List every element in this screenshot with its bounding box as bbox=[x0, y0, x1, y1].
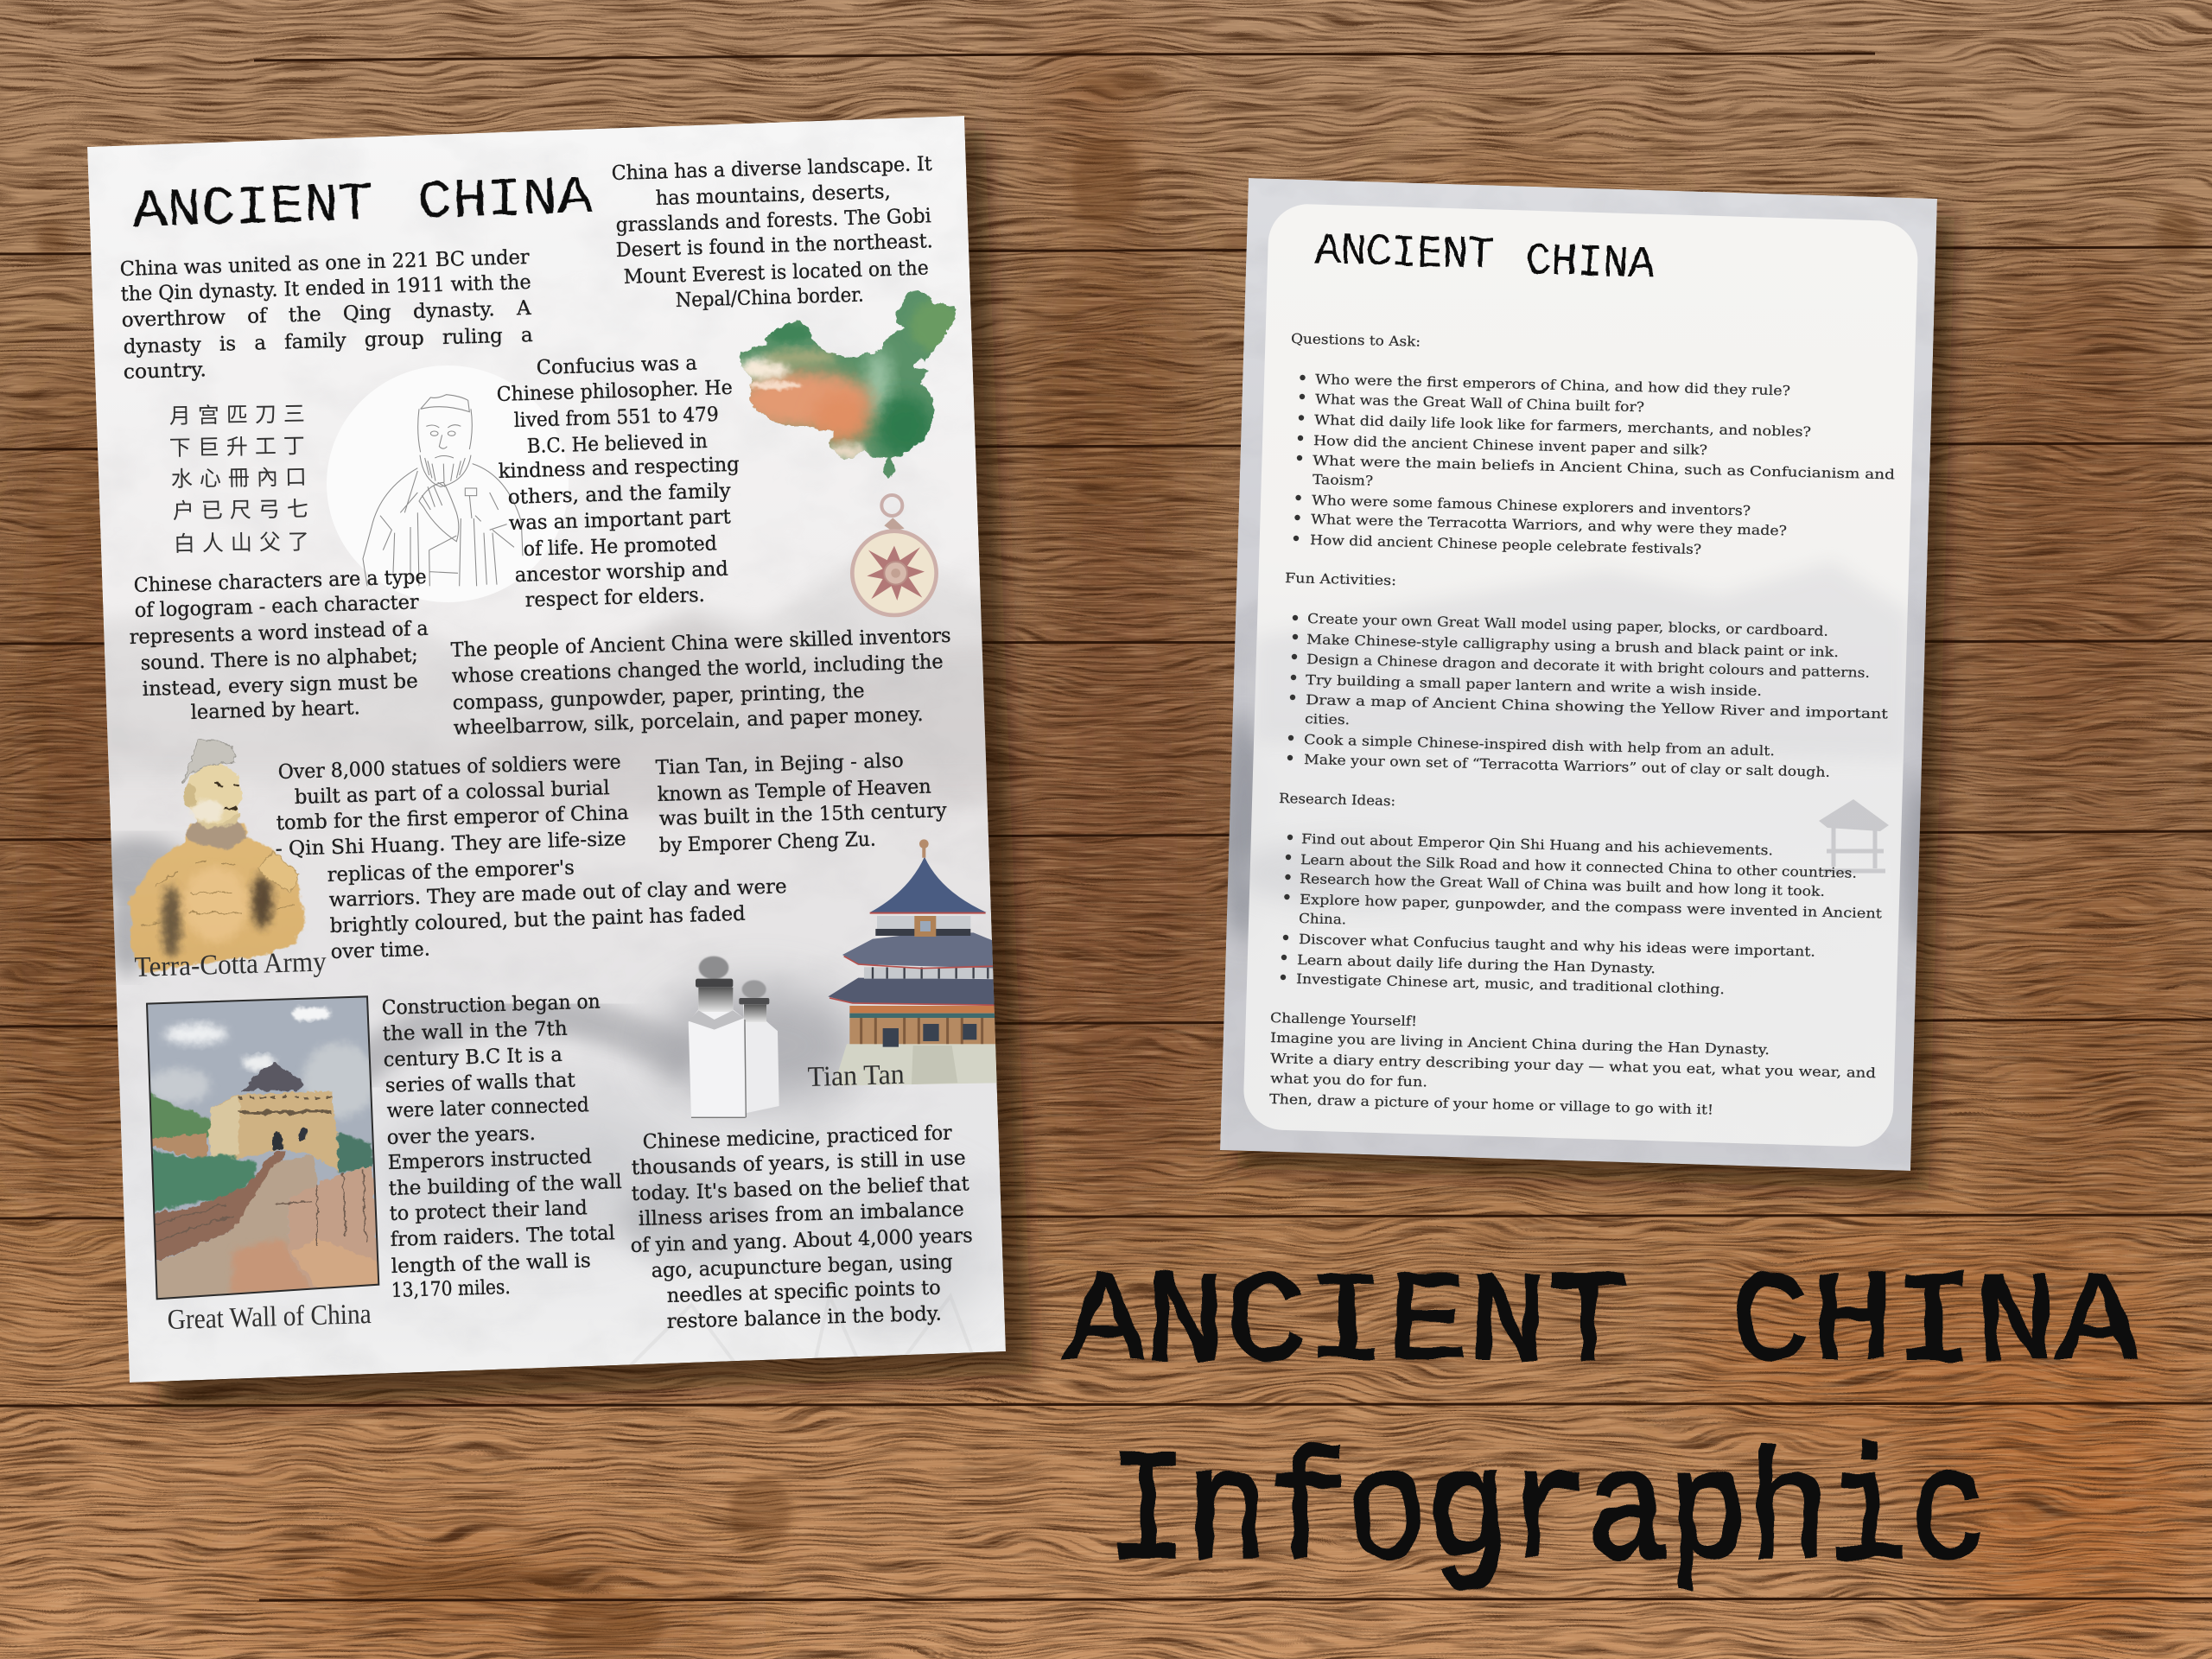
illustration: watercolour map of China bbox=[732, 285, 962, 481]
text: Chinese characters: of logogram - each character bbox=[134, 591, 419, 622]
ink wash background of activities page bbox=[1218, 178, 1942, 1171]
label: Tian Tan: Tian Tan bbox=[807, 1059, 905, 1093]
text: terracotta soldiers: Over 8,000 statues of soldiers were bbox=[277, 751, 621, 784]
ink wash mountains background bbox=[69, 116, 1020, 1382]
text: Great Wall construction: Construction began on bbox=[381, 990, 601, 1020]
Chinese characters grid bbox=[169, 402, 309, 556]
section: fun activities bbox=[1285, 570, 1889, 780]
panel: main infographic page bbox=[69, 116, 1020, 1382]
text: terracotta soldiers: replicas of the emporer's bbox=[327, 857, 575, 887]
label: Terra-Cotta Army: Terra-Cotta Army bbox=[134, 946, 327, 983]
section: fun activities: Cook a simple Chinese-inspired dish with help from an adult. bbox=[1304, 732, 1775, 759]
text: inventors bbox=[450, 625, 951, 740]
shadow of activity page bbox=[1237, 199, 1955, 1191]
heading: ANCIENT CHINA: ANCIENT bbox=[131, 174, 373, 243]
Chinese characters grid: 月宫匹刀三 bbox=[169, 402, 305, 429]
text: Great Wall construction: century B.C It is a bbox=[383, 1044, 563, 1071]
section: research ideas: Investigate Chinese art, music, and traditional clothing. bbox=[1296, 971, 1725, 997]
text: Chinese characters bbox=[129, 566, 429, 724]
text: Great Wall construction: length of the wall is bbox=[391, 1249, 591, 1278]
Chinese characters grid: 白人山父了 bbox=[174, 530, 309, 556]
text: Great Wall construction: the wall in the 7th bbox=[382, 1018, 568, 1046]
Chinese characters grid: 水心冊內口 bbox=[171, 465, 307, 492]
shadow of main page bbox=[112, 130, 1033, 1410]
text: Tian Tan: Tian Tan, in Bejing - also bbox=[655, 749, 904, 779]
text: terracotta soldiers: - Qin Shi Huang. They are life-size bbox=[275, 828, 626, 861]
section: challenge yourself: what you do for fun. bbox=[1270, 1071, 1427, 1090]
text: Chinese medicine: illness arises from an imbalance bbox=[638, 1198, 964, 1230]
section: research ideas: Research how the Great Wall of China was built and how long it took. bbox=[1300, 871, 1825, 899]
section: research ideas: Learn about daily life during the Han Dynasty. bbox=[1297, 952, 1656, 976]
text: Great Wall construction: Emperors instructed bbox=[387, 1146, 592, 1174]
text: Confucius: Confucius was a bbox=[536, 352, 697, 379]
text: terracotta soldiers: warriors. They are made out of clay and were bbox=[328, 875, 787, 912]
heading: ANCIENT CHINA (activities page): CHINA bbox=[1525, 236, 1656, 290]
label: Great Wall of China: Great Wall of China bbox=[167, 1299, 372, 1336]
text: diverse landscape bbox=[611, 153, 933, 312]
text: Great Wall construction: the building of the wall bbox=[388, 1171, 622, 1200]
text: Confucius: ancestor worship and bbox=[514, 558, 728, 587]
section: fun activities: Fun Activities: bbox=[1285, 570, 1396, 588]
text: Great Wall construction: series of walls that bbox=[385, 1069, 576, 1097]
text: Confucius: B.C. He believed in bbox=[526, 430, 708, 458]
text: diverse landscape: Desert is found in the northeast. bbox=[615, 230, 933, 262]
text: Great Wall construction: to protect their land bbox=[389, 1197, 588, 1225]
text: Great Wall construction: were later connected bbox=[386, 1094, 589, 1122]
section: fun activities: Try building a small paper lantern and write a wish inside. bbox=[1306, 672, 1762, 699]
section: research ideas: Find out about Emperor Qin Shi Huang and his achievements. bbox=[1301, 831, 1773, 858]
section: fun activities: cities. bbox=[1305, 711, 1350, 728]
section: challenge yourself bbox=[1269, 1010, 1876, 1118]
section: research ideas bbox=[1279, 791, 1883, 997]
text: Confucius: kindness and respecting bbox=[498, 454, 740, 483]
text: Chinese medicine: today. It's based on the belief that bbox=[631, 1173, 970, 1205]
text: inventors: compass, gunpowder, paper, printing, the bbox=[452, 680, 865, 715]
section: challenge yourself: Then, draw a picture of your home or village to go with it! bbox=[1269, 1091, 1713, 1118]
text: Chinese characters: instead, every sign must be bbox=[142, 671, 418, 701]
text: Chinese medicine: Chinese medicine, practiced for bbox=[642, 1122, 952, 1154]
text: Confucius: respect for elders. bbox=[524, 584, 705, 612]
text: Great Wall construction bbox=[381, 990, 622, 1302]
text: China unification: country. bbox=[123, 359, 207, 384]
text: diverse landscape: Mount Everest is located on the bbox=[623, 257, 929, 289]
section: questions to ask: How did the ancient Chinese invent paper and silk? bbox=[1313, 433, 1707, 458]
heading: ANCIENT CHINA: CHINA bbox=[416, 167, 594, 234]
section: challenge yourself: Write a diary entry describing your day — what you eat, what you wear, and bbox=[1270, 1051, 1876, 1081]
title: ANCIENT CHINA on wood bbox=[1065, 1254, 2139, 1397]
text: Confucius bbox=[496, 352, 740, 612]
section: research ideas: Research Ideas: bbox=[1279, 791, 1395, 809]
text: Chinese characters: Chinese characters are a type bbox=[133, 566, 427, 597]
section: challenge yourself: Imagine you are living in Ancient China during the Han Dynasty. bbox=[1270, 1030, 1770, 1058]
text: diverse landscape: has mountains, deserts, bbox=[655, 181, 891, 210]
panel: activities page bbox=[1218, 178, 1942, 1171]
text: Tian Tan: known as Temple of Heaven bbox=[657, 776, 931, 806]
text: Chinese medicine: ago, acupuncture began, using bbox=[651, 1251, 953, 1282]
section: questions to ask: Taoism? bbox=[1313, 472, 1373, 489]
text: China unification: overthrow of the Qing dynasty. A bbox=[121, 297, 531, 332]
section: fun activities: Design a Chinese dragon and decorate it with bright colours and patterns. bbox=[1306, 652, 1870, 681]
illustration: Temple of Heaven bbox=[828, 839, 1000, 1086]
text: terracotta soldiers: tomb for the first emperor of China bbox=[276, 802, 629, 835]
text: terracotta soldiers bbox=[275, 751, 787, 963]
section: fun activities: Draw a map of Ancient China showing the Yellow River and important bbox=[1306, 692, 1889, 721]
title: ANCIENT CHINA on wood: ANCIENT bbox=[1065, 1254, 1629, 1397]
section: questions to ask: What were the main beliefs in Ancient China, such as Confucianism and bbox=[1313, 453, 1895, 482]
section: research ideas: Learn about the Silk Road and how it connected China to other countries. bbox=[1300, 852, 1857, 881]
text: inventors: wheelbarrow, silk, porcelain, and paper money. bbox=[453, 703, 924, 740]
text: Chinese medicine bbox=[630, 1122, 973, 1333]
text: Chinese medicine: of yin and yang. About 4,000 years bbox=[630, 1224, 973, 1257]
title: ANCIENT CHINA on wood: CHINA bbox=[1730, 1254, 2139, 1397]
text: diverse landscape: grasslands and forests. The Gobi bbox=[615, 205, 931, 237]
text: Confucius: of life. He promoted bbox=[523, 532, 717, 561]
text: Tian Tan bbox=[655, 749, 947, 857]
text: terracotta soldiers: built as part of a colossal burial bbox=[294, 777, 610, 809]
Chinese characters grid: 户已尺弓七 bbox=[173, 497, 308, 524]
text: China unification: China was united as one in 221 BC under bbox=[119, 246, 530, 281]
heading: ANCIENT CHINA (activities page) bbox=[1315, 226, 1656, 290]
illustration: Great Wall painting bbox=[138, 988, 391, 1307]
section: research ideas: Explore how paper, gunpowder, and the compass were invented in Ancient bbox=[1300, 892, 1883, 921]
text: Confucius: others, and the family bbox=[507, 480, 731, 509]
text: inventors: The people of Ancient China were skilled inventors bbox=[450, 625, 951, 662]
heading: ANCIENT CHINA bbox=[131, 167, 594, 243]
text: Chinese characters: learned by heart. bbox=[190, 696, 360, 724]
section: challenge yourself: Challenge Yourself! bbox=[1270, 1010, 1417, 1029]
text: Confucius: lived from 551 to 479 bbox=[513, 404, 719, 432]
text: terracotta soldiers: brightly coloured, but the paint has faded bbox=[329, 903, 746, 938]
section: questions to ask: Questions to Ask: bbox=[1291, 331, 1421, 350]
illustration: compass bbox=[852, 495, 937, 615]
illustration: Confucius line drawing bbox=[363, 395, 523, 586]
section: questions to ask: Who were the first emperors of China, and how did they rule? bbox=[1315, 372, 1790, 398]
text: Tian Tan: was built in the 15th century bbox=[658, 799, 947, 830]
text: China unification: the Qin dynasty. It ended in 1911 with the bbox=[120, 271, 531, 306]
white circle behind Confucius bbox=[327, 365, 569, 602]
faint mountain and pagoda bbox=[1236, 562, 1910, 907]
rounded inner panel bbox=[1243, 203, 1919, 1147]
text: Chinese characters: represents a word instead of a bbox=[129, 618, 429, 649]
text: inventors: whose creations changed the world, including the bbox=[451, 651, 944, 688]
text: Chinese medicine: needles at specific points to bbox=[666, 1277, 941, 1307]
heading: ANCIENT CHINA (activities page): ANCIENT bbox=[1315, 226, 1494, 282]
text: Chinese characters: sound. There is no alphabet; bbox=[140, 644, 418, 675]
section: questions to ask bbox=[1291, 331, 1895, 557]
text: Tian Tan: by Emporer Cheng Zu. bbox=[658, 829, 876, 857]
section: research ideas: China. bbox=[1299, 911, 1346, 927]
text: Chinese medicine: thousands of years, is still in use bbox=[631, 1147, 966, 1179]
text: terracotta soldiers: over time. bbox=[330, 938, 430, 963]
section: questions to ask: Who were some famous Chinese explorers and inventors? bbox=[1312, 493, 1751, 518]
section: questions to ask: What were the Terracotta Warriors, and why were they made? bbox=[1311, 512, 1787, 538]
Chinese characters grid: 下巨升工丁 bbox=[169, 434, 305, 461]
text: diverse landscape: China has a diverse landscape. It bbox=[611, 153, 933, 185]
title: Infographic on wood: Infographic bbox=[1108, 1426, 1988, 1605]
illustration: medicine bottles bbox=[689, 957, 779, 1117]
text: Great Wall construction: 13,170 miles. bbox=[391, 1276, 511, 1302]
text: Confucius: Chinese philosopher. He bbox=[496, 377, 733, 406]
section: fun activities: Make your own set of “Terracotta Warriors” out of clay or salt dough. bbox=[1304, 752, 1830, 780]
section: fun activities: Create your own Great Wall model using paper, blocks, or cardboard. bbox=[1307, 611, 1828, 639]
section: questions to ask: What was the Great Wall of China built for? bbox=[1315, 391, 1644, 415]
text: China unification bbox=[119, 246, 533, 384]
text: Chinese medicine: restore balance in the body. bbox=[666, 1303, 942, 1333]
text: Great Wall construction: over the years. bbox=[386, 1122, 536, 1149]
illustration: terra-cotta warrior bbox=[130, 741, 305, 974]
section: questions to ask: How did ancient Chinese people celebrate festivals? bbox=[1310, 532, 1701, 557]
section: questions to ask: What did daily life look like for farmers, merchants, and nobles? bbox=[1314, 412, 1811, 440]
section: fun activities: Make Chinese-style calligraphy using a brush and black paint or ink. bbox=[1306, 632, 1839, 660]
text: Confucius: was an important part bbox=[508, 505, 732, 535]
section: research ideas: Discover what Confucius taught and why his ideas were important. bbox=[1299, 931, 1815, 960]
text: diverse landscape: Nepal/China border. bbox=[675, 284, 864, 312]
text: Great Wall construction: from raiders. The total bbox=[390, 1222, 615, 1251]
text: China unification: dynasty is a family group ruling a bbox=[123, 324, 533, 359]
